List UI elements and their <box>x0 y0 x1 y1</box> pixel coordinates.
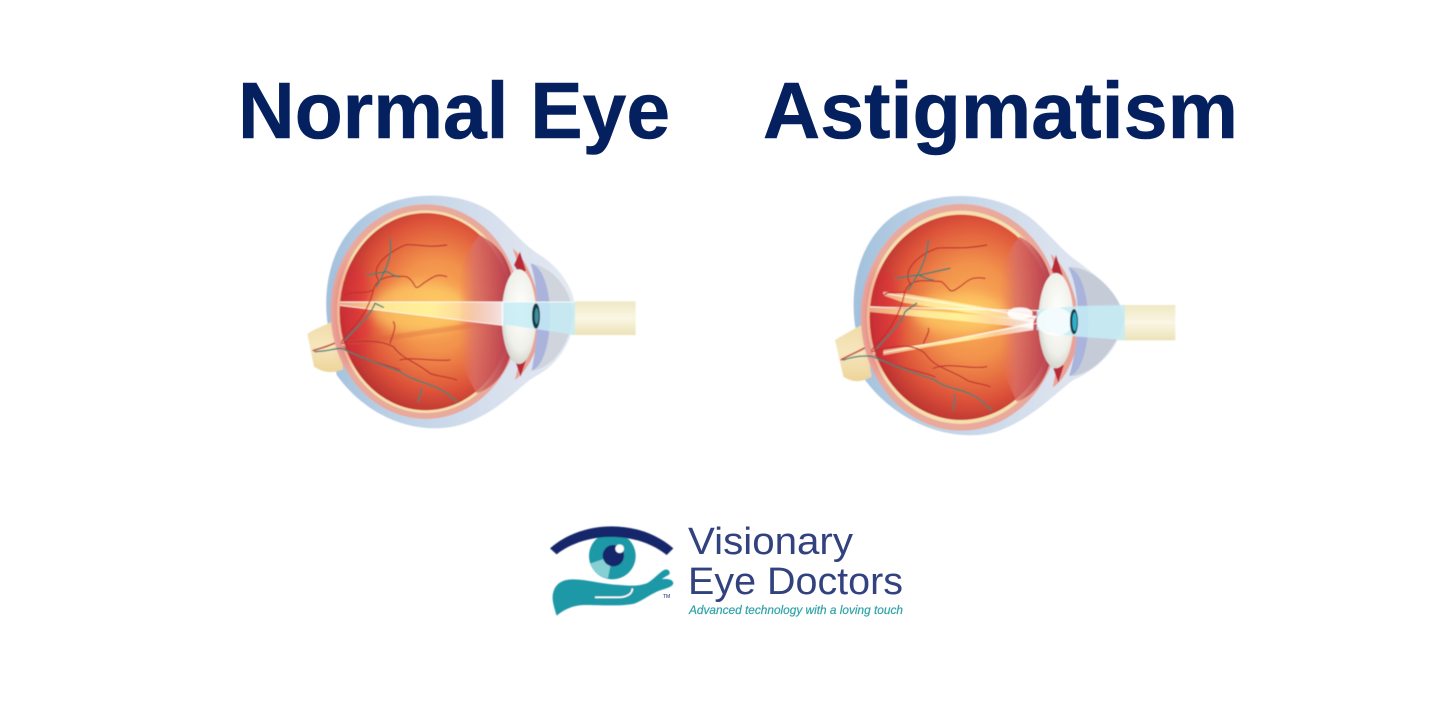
ciliary region <box>458 235 512 393</box>
pink choroid layer <box>861 204 1061 431</box>
pupil <box>1070 309 1078 334</box>
retinal vessels <box>843 240 992 410</box>
cornea <box>1068 267 1124 376</box>
lens <box>1038 273 1074 368</box>
sclera outer layer <box>326 196 575 428</box>
pink choroid layer <box>331 204 521 419</box>
trademark mark: TM <box>663 594 670 600</box>
three scattered yellow beams <box>883 292 1037 323</box>
title: Astigmatism: Astigmatism <box>763 66 1238 155</box>
pupil <box>603 545 624 566</box>
optic nerve <box>835 324 872 381</box>
red glow near optic disc <box>868 270 902 370</box>
cornea <box>531 263 573 371</box>
red glow near optic disc <box>338 263 372 363</box>
eyebrow arc <box>550 526 673 555</box>
iris pink tissue <box>503 248 541 380</box>
hand <box>553 570 673 616</box>
cream retina rim <box>337 210 514 413</box>
pupil <box>532 303 540 329</box>
eye interior <box>340 213 512 410</box>
yellow glow around beams <box>913 293 1007 333</box>
light path through lens and cornea <box>1037 305 1125 340</box>
ciliary tips <box>514 252 526 377</box>
lens <box>502 269 536 364</box>
light beam entering normal eye <box>570 301 636 335</box>
light path through lens and cornea <box>502 302 575 335</box>
shadow streak below beam <box>347 322 503 343</box>
logo wordmark line two: Eye Doctors <box>688 561 903 603</box>
iris pink tissue <box>1040 254 1078 387</box>
illustration: astigmatism eye cross-section <box>835 196 1175 435</box>
cream retina rim <box>867 211 1055 424</box>
optic nerve <box>307 320 343 372</box>
title: Normal Eye: Normal Eye <box>238 66 670 155</box>
retinal vessels <box>315 238 457 402</box>
yellow glow around beam <box>370 283 470 333</box>
logo wordmark line one: Visionary <box>688 521 853 563</box>
logo tagline: Advanced technology with a loving touch <box>688 605 903 617</box>
ciliary region <box>1000 237 1052 402</box>
eye interior <box>870 215 1052 420</box>
ciliary tips <box>1052 255 1064 383</box>
logo icon: eye over hand <box>550 526 673 616</box>
logo: Visionary Eye Doctors <box>550 521 903 617</box>
light beam entering astigmatic eye <box>1117 305 1175 340</box>
focused yellow beam <box>340 302 503 325</box>
iris <box>589 533 636 579</box>
illustration: normal eye cross-section <box>307 196 636 428</box>
sclera outer layer <box>854 196 1124 435</box>
